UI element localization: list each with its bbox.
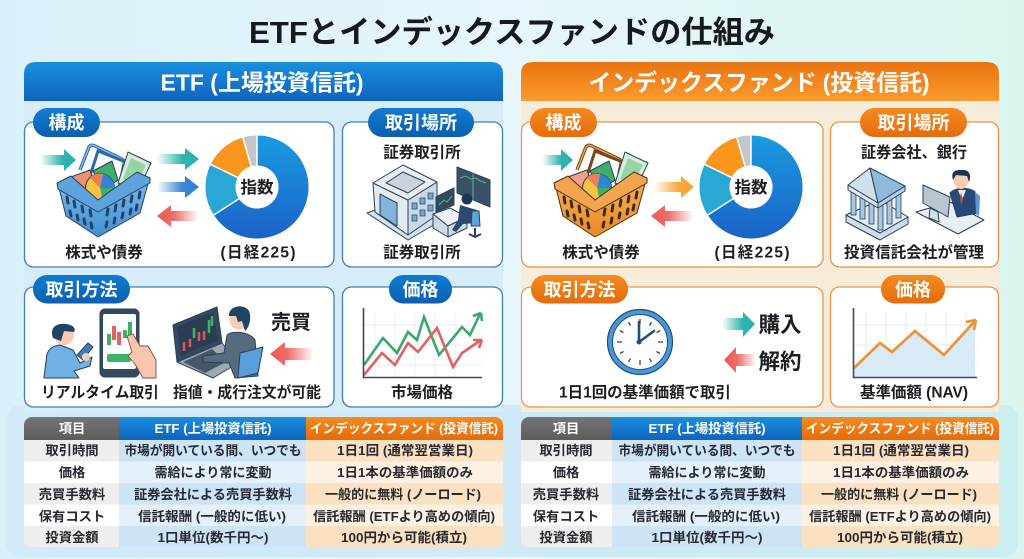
pill: 取引場所 [860, 108, 967, 137]
pill: 価格: 価格 [895, 280, 931, 300]
arrow: red from index [157, 205, 197, 227]
arrow: teal in [41, 149, 76, 171]
line chart: market price [364, 308, 482, 378]
arrow: teal buy [723, 312, 755, 337]
pill: 価格: 価格 [402, 280, 438, 300]
arrow: blue to index [158, 176, 199, 198]
pill: 取引場所: 取引場所 [385, 113, 457, 133]
comparison table: ETF side: 投資金額 [45, 529, 99, 545]
comparison table: fund side: 売買手数料 [533, 486, 599, 502]
comparison table: fund side: 市場が開いている間、いつでも [618, 442, 796, 458]
pill: 取引場所 [368, 108, 474, 137]
icon: stock exchange building and trader [367, 165, 490, 240]
comparison table: fund side [521, 417, 999, 547]
pill: 構成 [530, 108, 597, 137]
label: Nikkei 225: (日経225) [714, 244, 790, 262]
card: ETF venue [342, 108, 502, 267]
comparison table: ETF side: 売買手数料 [39, 486, 105, 502]
card: ETF trading method [24, 275, 334, 407]
comparison table: fund side: 項目 [553, 421, 579, 436]
pill: 構成 [33, 108, 100, 137]
comparison table: fund side: 1口単位(数千円～) [652, 529, 762, 545]
label: market price: 市場価格 [391, 382, 453, 402]
comparison table: ETF side: 1口単位(数千円～) [158, 529, 268, 545]
comparison table: ETF side: 取引時間 [45, 442, 99, 458]
pill: 取引方法 [531, 275, 628, 304]
pill: 取引方法: 取引方法 [544, 279, 616, 300]
label: limit and market orders: 指値・成行注文が可能 [173, 382, 321, 402]
title: ETFとインデックスファンドの仕組み [249, 15, 775, 50]
comparison table: ETF side: 項目 [59, 421, 85, 436]
comparison table: fund side: インデックスファンド (投資信託) [806, 420, 994, 436]
card: ETF composition [24, 108, 334, 267]
arrow: teal in [543, 149, 573, 171]
panel: index fund [521, 62, 999, 547]
index fund header band [521, 62, 999, 101]
comparison table: ETF side: 一般的に無料 (ノーロード) [325, 486, 481, 502]
comparison table: ETF side: 1日1本の基準価額のみ [337, 464, 473, 480]
label: NAV: 基準価額 (NAV) [860, 382, 968, 402]
icon: person with phone [44, 324, 93, 378]
pill: 構成: 構成 [48, 112, 84, 133]
index fund header band: インデックスファンド (投資信託) [588, 70, 930, 96]
donut chart: index [699, 136, 803, 238]
comparison table: fund side: 需給により常に変動 [648, 464, 766, 480]
comparison table: fund side: 1日1本の基準価額のみ [833, 464, 969, 480]
donut chart: index: 指数 [240, 178, 274, 197]
comparison table: ETF side: 価格 [59, 464, 86, 480]
comparison table: ETF side: 証券会社による売買手数料 [134, 486, 292, 502]
label: purchase: 購入 [758, 313, 802, 337]
comparison table: fund side: 保有コスト [533, 509, 599, 524]
comparison table: ETF side: 信託報酬 (一般的に低い) [138, 508, 286, 524]
label: managed by investment trust company: 投資信託会社が管理 [844, 242, 984, 262]
label: redemption: 解約 [758, 350, 802, 374]
card: fund trading method [522, 275, 823, 407]
comparison table: fund side: 投資金額 [539, 529, 593, 545]
donut chart: index [205, 136, 309, 238]
icon: basket [57, 145, 151, 237]
comparison table: ETF side: 保有コスト [39, 509, 105, 524]
comparison table: fund side: ETF (上場投資信託) [648, 420, 766, 436]
icon: bank [846, 168, 908, 240]
comparison table: fund side: 信託報酬 (一般的に低い) [632, 508, 780, 524]
pill: 取引方法: 取引方法 [46, 279, 118, 300]
comparison table: ETF side: 市場が開いている間、いつでも [124, 442, 302, 458]
comparison table: ETF side: 100円から可能(積立) [341, 529, 467, 545]
comparison table: ETF side: 需給により常に変動 [154, 464, 272, 480]
label: stocks and bonds: 株式や債券 [562, 244, 640, 262]
icon: clock [608, 310, 672, 374]
ETF header band: ETF (上場投資信託) [160, 70, 364, 96]
arrow: orange to index [655, 176, 694, 198]
comparison table: ETF side [24, 417, 503, 547]
comparison table: fund side: 価格 [553, 464, 580, 480]
card: fund price [830, 275, 998, 407]
label: stock exchange bottom: 証券取引所 [383, 244, 461, 262]
ETF header band [24, 62, 503, 101]
comparison table: fund side: 100円から可能(積立) [837, 529, 963, 545]
label: buy and sell: 売買 [271, 311, 311, 334]
label: real-time trading: リアルタイム取引 [41, 384, 159, 402]
icon: person with laptop [173, 306, 263, 378]
label: Nikkei 225: (日経225) [220, 244, 296, 262]
panel: ETF [24, 62, 503, 547]
icon: basket [554, 145, 648, 237]
pill: 取引方法 [33, 275, 130, 304]
card: ETF price [342, 275, 502, 407]
pill: 価格 [389, 275, 452, 304]
arrow: red redeem [724, 347, 755, 373]
label: brokers and banks: 証券会社、銀行 [861, 144, 967, 162]
comparison table: ETF side: ETF (上場投資信託) [154, 420, 272, 436]
label: once a day at NAV: 1日1回の基準価額で取引 [559, 382, 731, 402]
card: fund venue [830, 108, 998, 267]
comparison table: ETF side: 信託報酬 (ETFより高めの傾向) [313, 508, 495, 524]
comparison table: ETF side: 1日1回 (通常翌営業日) [337, 442, 473, 458]
pill: 価格 [881, 275, 945, 304]
arrow: red from index [651, 205, 692, 227]
comparison table: ETF side: インデックスファンド (投資信託) [310, 420, 498, 436]
donut chart: index: 指数 [734, 178, 768, 197]
card: fund composition [522, 108, 823, 267]
arrow: red order [270, 342, 312, 366]
comparison table: fund side: 信託報酬 (ETFより高めの傾向) [809, 508, 991, 524]
label: stocks and bonds: 株式や債券 [65, 244, 143, 262]
pill: 取引場所: 取引場所 [878, 113, 950, 133]
line chart: NAV [854, 308, 977, 378]
label: stock exchange top: 証券取引所 [383, 144, 461, 162]
icon: phone with candlestick chart [100, 309, 156, 378]
comparison table: fund side: 一般的に無料 (ノーロード) [821, 486, 977, 502]
arrow: teal to index [158, 148, 199, 170]
pill: 構成: 構成 [546, 112, 582, 133]
icon: manager at computer [916, 170, 984, 234]
comparison table: fund side: 証券会社による売買手数料 [628, 486, 786, 502]
comparison table: fund side: 1日1回 (通常翌営業日) [833, 442, 969, 458]
comparison table: fund side: 取引時間 [539, 442, 593, 458]
